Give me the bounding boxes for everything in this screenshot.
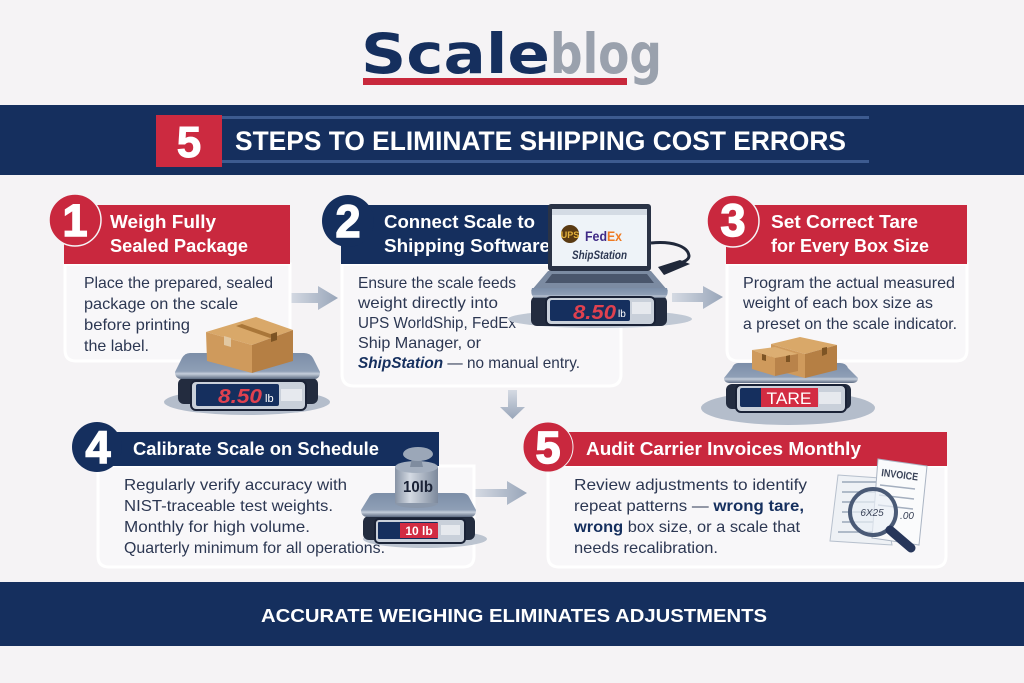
panel: step 2	[322, 195, 692, 386]
test weight	[395, 498, 438, 508]
number badge: 5	[535, 422, 561, 473]
body text: a preset on the scale indicator.	[743, 316, 957, 333]
body text: wrong box size, or a scale that	[573, 519, 801, 536]
carrier logos: Ex	[607, 228, 622, 244]
logo	[361, 22, 662, 86]
body text: weight of each box size as	[742, 295, 933, 312]
heading: Audit Carrier Invoices Monthly	[586, 438, 862, 459]
body text: the label.	[84, 338, 149, 355]
icon: scale with box: 8.50	[218, 386, 262, 408]
icon: laptop on scale: lb	[618, 309, 626, 320]
footer banner: ACCURATE WEIGHING ELIMINATES ADJUSTMENTS	[261, 605, 767, 626]
laptop base	[531, 271, 668, 291]
body text: before printing	[84, 317, 190, 334]
body text: repeat patterns — wrong tare,	[574, 498, 804, 515]
body text: package on the scale	[84, 296, 238, 313]
arrow: step 1 to 2	[290, 286, 338, 310]
badge: 5	[156, 115, 222, 167]
header bar	[97, 432, 439, 466]
logo: Scale	[361, 22, 550, 86]
laptop screen	[548, 204, 651, 271]
header bar	[341, 205, 566, 264]
icon: invoice with magnifier: 6X25	[860, 508, 884, 519]
body text: Program the actual measured	[743, 275, 955, 292]
body text: ShipStation — no manual entry.	[358, 355, 580, 372]
icon: scale with 10 lb weight: 10lb	[403, 479, 433, 496]
number badge	[523, 422, 573, 473]
heading: for Every Box Size	[771, 235, 929, 256]
number badge	[49, 194, 101, 246]
header bar	[726, 205, 967, 264]
heading: Calibrate Scale on Schedule	[133, 438, 379, 459]
logo: blog	[550, 22, 662, 86]
card body	[342, 264, 621, 386]
body text: weight directly into	[357, 295, 498, 312]
title banner	[0, 105, 1024, 175]
body text: Regularly verify accuracy with	[124, 477, 347, 494]
body text	[357, 275, 580, 372]
large box	[771, 337, 837, 354]
body text	[124, 477, 385, 557]
icon: scale with 10 lb weight	[361, 447, 487, 548]
card body	[98, 466, 474, 567]
icon: scale with box: lb	[265, 393, 274, 405]
card body	[548, 466, 946, 567]
body text	[84, 275, 273, 355]
body text: Ship Manager, or	[358, 335, 482, 352]
heading: STEPS TO ELIMINATE SHIPPING COST ERRORS	[235, 126, 846, 156]
heading	[384, 211, 550, 256]
body text: Place the prepared, sealed	[84, 275, 273, 292]
badge: 5: 5	[177, 118, 201, 167]
card body	[727, 264, 967, 361]
carrier logos: Fed	[585, 228, 607, 244]
arrow: step 2 to 5	[500, 390, 525, 419]
body text	[573, 477, 807, 557]
body text: Ensure the scale feeds	[358, 275, 516, 292]
number badge	[72, 422, 122, 473]
number badge	[322, 195, 374, 247]
number badge: 4	[85, 422, 111, 473]
icon: laptop on scale	[508, 204, 692, 328]
body text: Monthly for high volume.	[124, 519, 310, 536]
icon: scale with 10 lb weight: 10 lb	[405, 524, 433, 538]
arrow: step 2 to 3	[672, 286, 723, 309]
number badge	[707, 195, 759, 247]
heading: Connect Scale to	[384, 211, 535, 232]
small box	[752, 347, 798, 358]
icon: scale with boxes and tare display	[701, 337, 875, 425]
panel: step 4	[72, 422, 487, 567]
heading: Sealed Package	[110, 235, 248, 256]
cable	[651, 243, 689, 268]
heading: Set Correct Tare	[771, 211, 918, 232]
body text: UPS WorldShip, FedEx	[358, 315, 516, 332]
body text: needs recalibration.	[574, 540, 718, 557]
body text: Quarterly minimum for all operations.	[124, 540, 385, 557]
header bar	[64, 205, 290, 264]
body text	[742, 275, 957, 333]
heading: Weigh Fully	[110, 211, 217, 232]
header bar	[548, 432, 947, 466]
icon: scale with box	[164, 317, 330, 415]
icon: scale with boxes and tare display: TARE	[766, 389, 812, 408]
icon: invoice with magnifier: .00	[900, 511, 914, 522]
heading	[771, 211, 929, 256]
carrier logos	[561, 225, 627, 262]
number badge: 3	[720, 195, 746, 246]
panel: step 5	[523, 422, 947, 567]
box	[206, 317, 293, 345]
number badge: 2	[335, 196, 361, 247]
carrier logos: UPS	[561, 230, 579, 240]
heading: Shipping Software	[384, 235, 550, 256]
number badge: 1	[62, 195, 88, 246]
panel: step 3	[701, 195, 967, 425]
footer banner	[0, 582, 1024, 646]
body text: Review adjustments to identify	[574, 477, 807, 494]
icon: laptop on scale: 8.50	[573, 302, 616, 324]
icon: invoice with magnifier	[830, 459, 927, 548]
card body	[65, 264, 290, 361]
icon: invoice with magnifier: INVOICE	[881, 467, 919, 483]
arrow: step 4 to 5	[475, 481, 527, 505]
heading	[110, 211, 248, 256]
carrier logos: ShipStation	[572, 250, 627, 262]
panel: step 1	[49, 194, 330, 415]
body text: NIST-traceable test weights.	[124, 498, 333, 515]
